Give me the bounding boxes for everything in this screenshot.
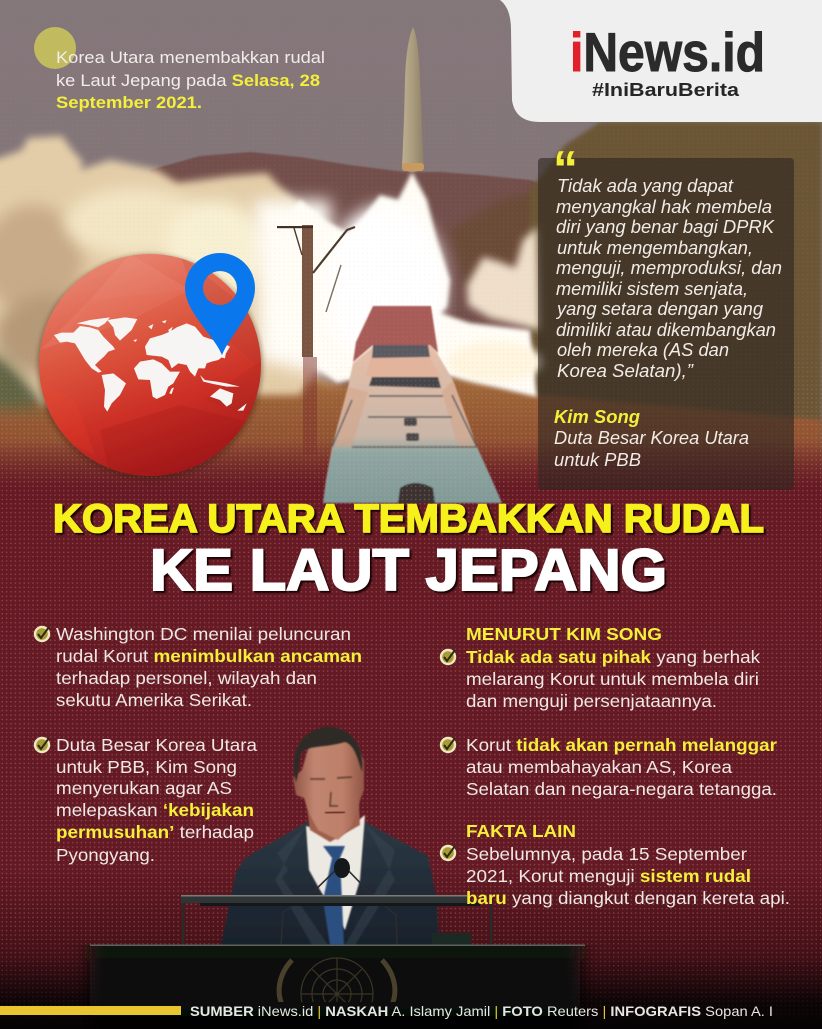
bullet 5 xyxy=(441,844,790,908)
title: KOREA UTARA TEMBAKKAN RUDAL xyxy=(53,497,764,541)
tree line on right xyxy=(530,122,822,500)
bullet 4 xyxy=(441,735,777,799)
footer yellow bar xyxy=(0,1006,181,1015)
quote text: untuk mengembangkan, xyxy=(557,238,753,258)
side panels xyxy=(323,380,477,503)
maroon panel xyxy=(0,488,822,1029)
dark ground patch left xyxy=(0,350,45,410)
footer credits: SUMBER iNews.id | NASKAH A. Islamy Jamil | FOTO Reuters | INFOGRAFIS Sopan A. I xyxy=(190,1003,773,1019)
hair xyxy=(294,727,362,782)
smoke cloud left xyxy=(0,136,340,410)
panel: quote xyxy=(538,141,794,490)
bullet 5: baru yang diangkut dengan kereta api. xyxy=(466,888,790,908)
footer xyxy=(0,1003,773,1019)
mountains xyxy=(150,152,560,400)
quote text: diri yang benar bagi DPRK xyxy=(556,217,775,237)
quote attribution xyxy=(554,407,749,470)
title: KE LAUT JEPANG xyxy=(150,538,667,603)
bullet 1: rudal Korut menimbulkan ancaman xyxy=(56,646,362,666)
bullet 2: untuk PBB, Kim Song xyxy=(56,757,237,777)
microphones xyxy=(281,864,397,945)
title xyxy=(53,497,764,603)
bullet 3 xyxy=(441,647,760,711)
lapels xyxy=(275,825,395,945)
lectern body xyxy=(80,945,589,1023)
intro text: Korea Utara menembakkan rudal xyxy=(56,48,325,67)
quote text xyxy=(555,176,782,381)
intro text: September 2021. xyxy=(56,93,202,112)
decorative yellow circle xyxy=(34,27,76,69)
bullet 4: Selatan dan negara-negara tetangga. xyxy=(466,779,777,799)
world map continents xyxy=(54,317,247,412)
podium rail supports xyxy=(183,900,491,945)
bullet 2: Duta Besar Korea Utara xyxy=(56,735,257,755)
quote mark: “ xyxy=(553,141,578,197)
bullet 2: Pyongyang. xyxy=(56,845,155,865)
heading: menurut kim song: MENURUT KIM SONG xyxy=(466,624,662,644)
quote attribution: Kim Song xyxy=(554,407,640,427)
right column xyxy=(441,624,790,908)
bullet 1: terhadap personel, wilayah dan xyxy=(56,668,317,688)
bullet 5: 2021, Korut menguji sistem rudal xyxy=(466,866,751,886)
map pin icon xyxy=(185,253,255,355)
neck and face xyxy=(306,790,360,842)
quote text: oleh mereka (AS dan xyxy=(557,340,729,360)
tie xyxy=(323,846,345,945)
bullet 2: melepaskan ‘kebijakan xyxy=(56,800,254,820)
quote text: yang setara dengan yang xyxy=(555,299,763,319)
utility pole xyxy=(277,225,355,455)
panel: logo xyxy=(500,0,822,122)
small buttons box xyxy=(432,933,471,945)
cargo cover xyxy=(353,306,438,362)
rocket xyxy=(402,27,424,172)
quote text: Tidak ada yang dapat xyxy=(557,176,734,196)
rocket plume and exhaust xyxy=(270,172,543,397)
bullet 1 xyxy=(35,624,362,710)
missile train xyxy=(323,306,502,503)
right smoke puff xyxy=(467,227,540,330)
bullet 5: Sebelumnya, pada 15 September xyxy=(466,844,747,864)
quote text: Korea Selatan),” xyxy=(557,361,694,381)
UN emblem xyxy=(276,957,398,1002)
quote text: memiliki sistem senjata, xyxy=(556,279,748,299)
bullet 2: menyerukan agar AS xyxy=(56,778,232,798)
suit xyxy=(221,822,439,945)
speaker with podium xyxy=(90,727,585,1029)
shirt xyxy=(306,815,365,930)
lectern rail xyxy=(181,895,467,903)
bullet 4: atau membahayakan AS, Korea xyxy=(466,757,732,777)
bullet 1: Washington DC menilai peluncuran xyxy=(56,624,351,644)
quote attribution: Duta Besar Korea Utara xyxy=(554,428,749,448)
bullet 3: melarang Korut untuk membela diri xyxy=(466,669,759,689)
intro text xyxy=(56,48,325,112)
quote text: menguji, memproduksi, dan xyxy=(556,258,782,278)
bullet 1: sekutu Amerika Serikat. xyxy=(56,690,252,710)
world globe with map xyxy=(37,254,263,480)
bullet 4: Korut tidak akan pernah melanggar xyxy=(466,735,777,755)
heading: fakta lain: FAKTA LAIN xyxy=(466,821,576,841)
bullet 2: permusuhan’ terhadap xyxy=(56,822,254,842)
quote text: dimiliki atau dikembangkan xyxy=(556,320,776,340)
quote attribution: untuk PBB xyxy=(554,450,641,470)
intro text: ke Laut Jepang pada Selasa, 28 xyxy=(56,71,320,90)
logo wordmark: iNews.id xyxy=(570,21,765,83)
bullet 2 xyxy=(35,735,257,865)
bullet 3: dan menguji persenjataannya. xyxy=(466,691,717,711)
logo tagline: #IniBaruBerita xyxy=(592,79,740,100)
bullet 3: Tidak ada satu pihak yang berhak xyxy=(466,647,760,667)
quote text: menyangkal hak membela xyxy=(556,197,772,217)
ground xyxy=(0,372,822,520)
left bullets xyxy=(35,624,362,865)
